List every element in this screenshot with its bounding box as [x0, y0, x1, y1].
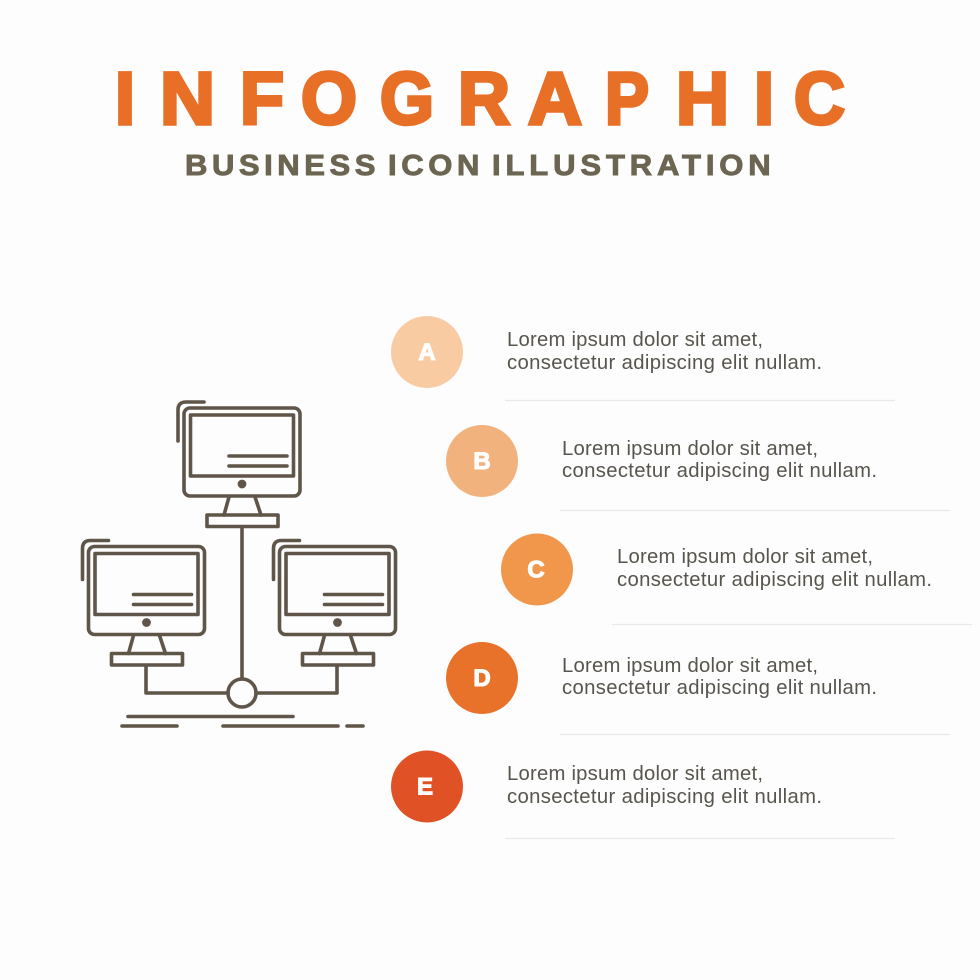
- text D: consectetur adipiscing elit nullam.: [562, 677, 877, 699]
- monitor: right: [274, 540, 396, 665]
- subtitle: [185, 150, 771, 182]
- title: [115, 57, 845, 140]
- monitor: left: [82, 540, 204, 665]
- title: R: [458, 57, 510, 140]
- subtitle: BUSINESS: [185, 150, 375, 182]
- item D: [446, 642, 877, 714]
- item A: [391, 316, 822, 388]
- title: N: [160, 57, 215, 140]
- badge B: [446, 425, 518, 497]
- letter B: B: [473, 448, 491, 475]
- network connectors: [146, 527, 337, 693]
- title: A: [528, 57, 582, 140]
- title: G: [380, 57, 434, 140]
- item E: [391, 750, 822, 822]
- ground lines: [122, 716, 363, 726]
- letter A: A: [418, 339, 436, 366]
- badge D: [446, 642, 518, 714]
- text A: Lorem ipsum dolor sit amet,: [507, 329, 763, 351]
- title: P: [605, 57, 649, 140]
- subtitle: ILLUSTRATION: [492, 150, 771, 182]
- text A: consectetur adipiscing elit nullam.: [507, 352, 822, 374]
- text B: consectetur adipiscing elit nullam.: [562, 460, 877, 482]
- icon: networked computers: [82, 402, 396, 726]
- badge C: [501, 534, 573, 606]
- letter C: C: [527, 556, 545, 584]
- text B: Lorem ipsum dolor sit amet,: [562, 438, 818, 460]
- subtitle: ICON: [388, 150, 479, 182]
- text C: Lorem ipsum dolor sit amet,: [617, 546, 873, 568]
- network hub: [228, 679, 256, 707]
- title: I: [754, 57, 774, 140]
- text E: consectetur adipiscing elit nullam.: [507, 786, 822, 808]
- monitor: top: [178, 402, 300, 526]
- text E: Lorem ipsum dolor sit amet,: [507, 763, 763, 785]
- title: C: [794, 57, 845, 140]
- title: I: [115, 57, 135, 140]
- badge E: [391, 750, 463, 822]
- item C: [501, 534, 932, 606]
- letter D: D: [473, 665, 491, 692]
- title: H: [676, 57, 729, 140]
- badge A: [391, 316, 463, 388]
- text D: Lorem ipsum dolor sit amet,: [562, 655, 818, 677]
- text C: consectetur adipiscing elit nullam.: [617, 569, 932, 591]
- title: O: [301, 57, 357, 140]
- title: F: [240, 57, 284, 140]
- letter E: E: [417, 774, 433, 800]
- item B: [446, 425, 877, 497]
